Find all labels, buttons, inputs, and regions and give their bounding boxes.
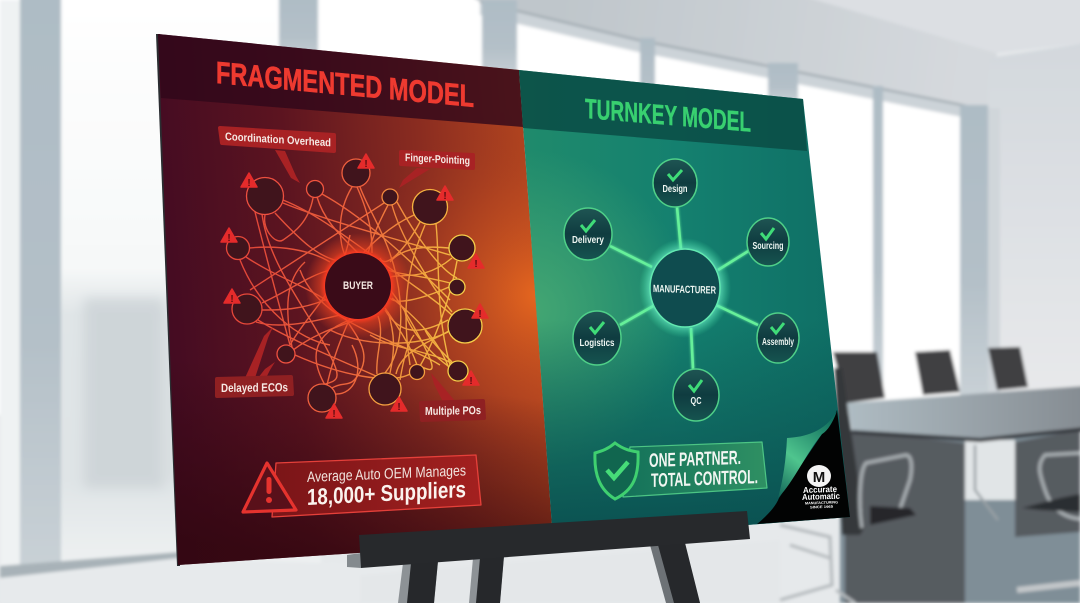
easel ledge xyxy=(347,511,750,568)
poster board xyxy=(156,34,850,566)
logo: accurate automatic: M xyxy=(813,469,825,486)
network links xyxy=(240,187,462,394)
label: coordination overhead: Coordination Overhead xyxy=(225,131,331,149)
far chair legs xyxy=(975,445,998,520)
hub: manufacturer xyxy=(639,238,731,338)
label: multiple pos xyxy=(421,373,484,420)
right chair arm xyxy=(1040,453,1080,519)
icon: shield check xyxy=(595,443,638,499)
warning triangles: ! xyxy=(443,191,447,202)
callout: one partner total control: ONE PARTNER. xyxy=(649,447,741,472)
warning triangles: ! xyxy=(474,259,478,270)
node: logistics: Logistics xyxy=(580,338,615,349)
easel legs xyxy=(398,543,700,603)
green header band xyxy=(519,70,807,151)
node: delivery: Delivery xyxy=(572,235,604,246)
logo: accurate automatic: SINCE 1965 xyxy=(810,505,833,509)
floor right xyxy=(840,430,1080,603)
logo: accurate automatic: Automatic xyxy=(802,491,840,502)
supplier nodes xyxy=(226,159,482,412)
node: qc xyxy=(673,369,719,421)
node: sourcing: Sourcing xyxy=(752,241,784,252)
logo: accurate automatic: MANUFACTURING xyxy=(805,500,838,505)
label: delayed ecos: Delayed ECOs xyxy=(221,380,288,395)
node: qc: QC xyxy=(690,396,702,407)
label: delayed ecos xyxy=(217,327,292,396)
poster edge xyxy=(156,34,180,566)
callout: one partner total control xyxy=(595,442,767,499)
callout: one partner total control: TOTAL CONTROL. xyxy=(651,466,758,492)
warning triangles: ! xyxy=(397,402,401,413)
sill xyxy=(0,552,180,578)
warning triangles: ! xyxy=(364,159,368,170)
label: coordination overhead xyxy=(220,128,334,183)
page curl corner xyxy=(757,410,850,524)
node: sourcing xyxy=(747,218,789,266)
warning triangles: ! xyxy=(478,309,482,320)
node: delivery xyxy=(564,208,612,260)
table top xyxy=(847,386,1080,438)
label: finger-pointing xyxy=(399,152,473,188)
warning triangles: ! xyxy=(227,233,231,244)
hub: manufacturer: MANUFACTURER xyxy=(653,283,716,297)
icon: warning triangle xyxy=(243,463,296,512)
callout: 18,000+ suppliers: 18,000+ Suppliers xyxy=(307,476,466,510)
buyer hub: BUYER xyxy=(343,280,373,292)
upper wall above windows xyxy=(470,0,997,110)
node: design: Design xyxy=(662,184,688,195)
table base blocks xyxy=(845,430,965,603)
node: assembly: Assembly xyxy=(762,337,794,348)
node: logistics xyxy=(573,311,621,365)
warning triangles: ! xyxy=(230,294,234,305)
red header band xyxy=(158,34,523,127)
logo: accurate automatic xyxy=(802,465,840,509)
node: assembly xyxy=(757,313,799,363)
panel: turnkey model xyxy=(519,70,850,540)
callout: 18,000+ suppliers: Average Auto OEM Manages xyxy=(307,462,466,486)
far chairs xyxy=(833,347,1028,403)
front chair back xyxy=(834,368,865,535)
panel: fragmented model xyxy=(158,34,553,565)
warning triangles xyxy=(221,154,488,420)
logo: accurate automatic: Accurate xyxy=(803,484,837,495)
label: multiple pos: Multiple POs xyxy=(425,405,481,418)
callout: 18,000+ suppliers xyxy=(243,455,481,517)
buyer hub xyxy=(305,233,411,339)
green panel background xyxy=(519,70,850,540)
label: finger-pointing: Finger-Pointing xyxy=(405,152,470,167)
title: turnkey model: TURNKEY MODEL xyxy=(585,93,751,138)
chrome base right xyxy=(1017,583,1080,590)
right side wall xyxy=(988,43,1080,400)
easel xyxy=(347,511,750,603)
warning triangles: ! xyxy=(469,376,473,387)
hub spokes xyxy=(610,207,758,369)
chair arm chrome xyxy=(860,455,911,528)
floor left xyxy=(0,558,400,603)
node: design xyxy=(653,159,697,207)
window head trim xyxy=(480,2,987,122)
warning triangles: ! xyxy=(332,409,336,420)
title: fragmented model: FRAGMENTED MODEL xyxy=(216,55,474,114)
warning triangles: ! xyxy=(247,178,251,189)
red panel background xyxy=(158,34,553,565)
ceiling xyxy=(800,0,1080,53)
chrome chair base left xyxy=(780,525,855,603)
